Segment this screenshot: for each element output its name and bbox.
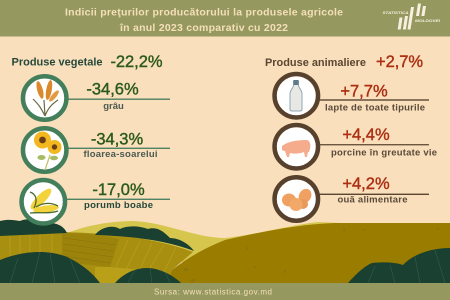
total: vegetal: -22,2% — [110, 53, 163, 71]
item: grâu — [23, 76, 170, 120]
panel: produse animaliere — [265, 53, 437, 221]
label: porumb boabe — [84, 200, 153, 211]
item: lapte — [275, 74, 429, 117]
icon: corn — [22, 180, 65, 223]
title — [65, 6, 343, 34]
total: animal: +2,7% — [376, 53, 423, 71]
header band — [0, 0, 450, 36]
value: +4,2% — [342, 175, 390, 193]
label: ouă alimentare — [338, 195, 408, 206]
value: -34,3% — [91, 130, 143, 148]
label: grâu — [103, 101, 124, 112]
title: în anul 2023 comparativ cu 2022 — [119, 22, 288, 34]
panel: produse vegetale — [12, 53, 170, 223]
icon: milk bottle — [275, 74, 318, 117]
value: -17,0% — [92, 181, 145, 199]
connector line — [66, 199, 170, 200]
value: +4,4% — [342, 126, 390, 144]
icon: pig — [275, 125, 318, 168]
value: +7,7% — [340, 83, 388, 101]
icon: wheat — [23, 76, 66, 120]
connector line — [318, 99, 429, 101]
label: lapte de toate tipurile — [325, 103, 425, 114]
icon: eggs — [275, 177, 318, 221]
logo: Statistica Moldovei: MOLDOVEI — [415, 19, 441, 23]
icon: sunflower — [23, 128, 66, 172]
landscape — [0, 219, 450, 283]
heading: produse vegetale: Produse vegetale — [12, 56, 102, 68]
label: floarea-soarelui — [84, 149, 158, 160]
item: porcine — [275, 125, 437, 168]
item: floarea-soarelui — [23, 128, 170, 172]
label: porcine în greutate vie — [331, 147, 437, 158]
connector line — [318, 194, 429, 195]
item: ouă — [275, 175, 429, 221]
heading: produse animaliere: Produse animaliere — [265, 57, 366, 69]
title: Indicii preţurilor producătorului la produsele agricole — [65, 6, 343, 18]
connector line — [66, 148, 170, 149]
source text: Sursa: www.statistica.gov.md — [154, 288, 272, 296]
connector line — [66, 98, 170, 100]
source band — [0, 283, 450, 300]
connector line — [318, 144, 429, 145]
logo: Statistica Moldovei — [382, 4, 441, 30]
logo: Statistica Moldovei: STATISTICA — [382, 11, 409, 15]
item: porumb boabe — [22, 180, 170, 223]
value: -34,6% — [86, 81, 139, 99]
